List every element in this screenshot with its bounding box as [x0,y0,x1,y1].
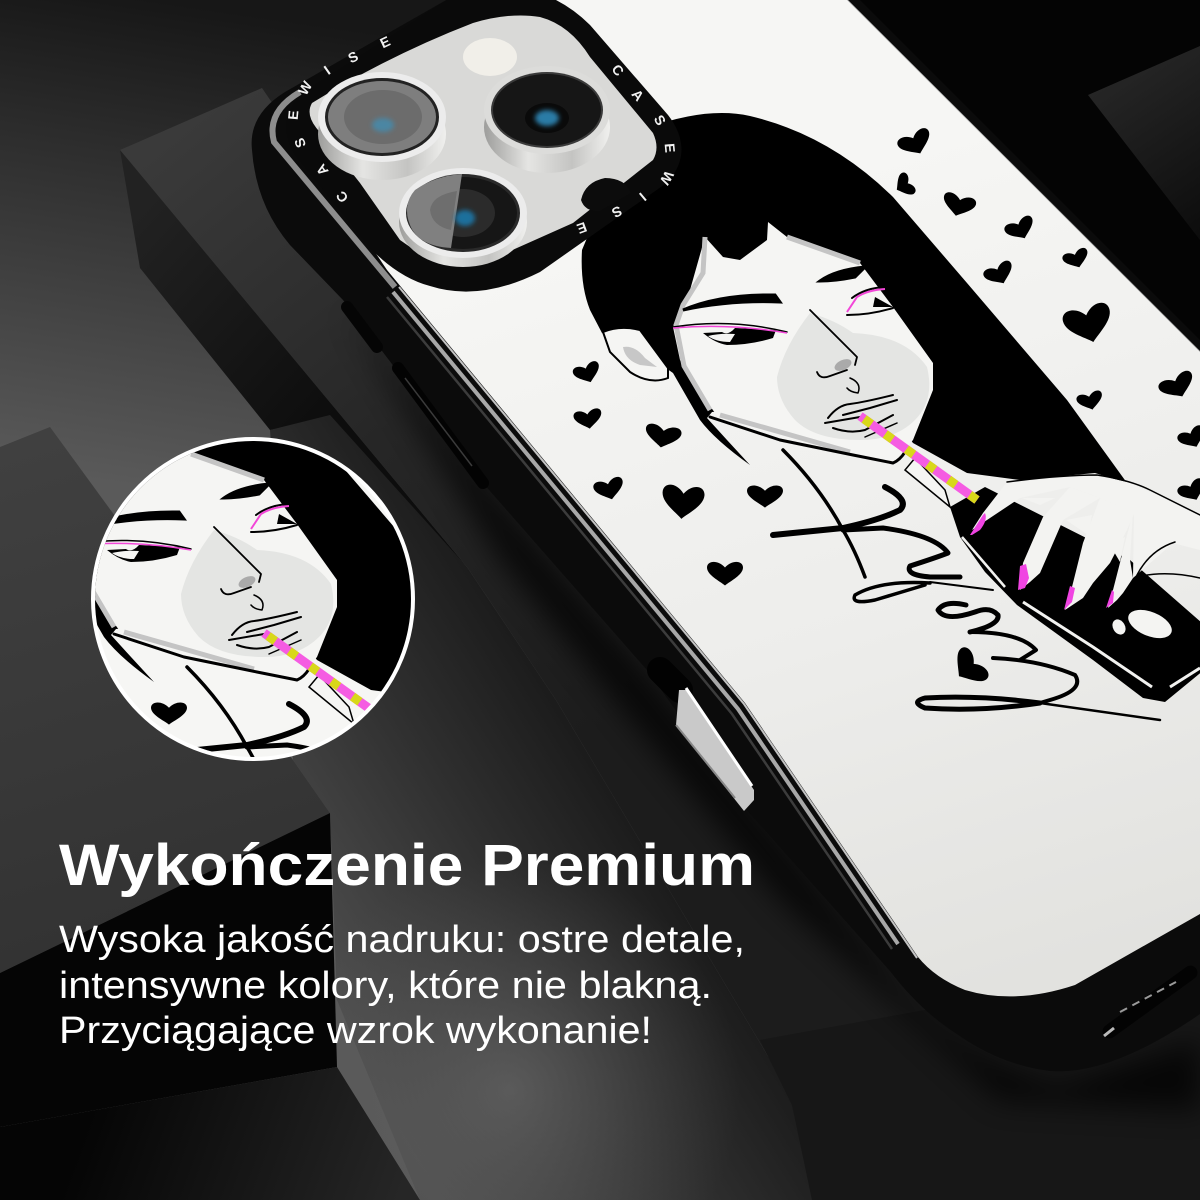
bottle [905,458,1200,702]
casewise lettering: A [629,86,647,104]
face [673,222,933,463]
body text [59,919,745,1052]
casewise lettering: I [636,190,650,204]
lens: bottom camera [399,168,527,267]
phone body [252,0,1200,1071]
island glass [310,15,656,263]
flash [463,38,517,76]
casewise lettering: I [321,62,333,78]
floor lower right [760,960,1200,1200]
clear bumper band [272,92,395,287]
block: lower front face [270,415,820,1200]
upper right dark backdrop [840,0,1200,360]
floor under lower left block [0,1067,420,1200]
casewise lettering: S [651,112,669,128]
hearts [572,126,1200,692]
straw [860,416,977,500]
body text: Przyciągające wzrok wykonanie! [59,1010,652,1052]
phone edge highlights [387,0,1200,958]
nails [970,513,1114,610]
lens: right camera [484,66,610,173]
face shading [676,237,929,452]
side buttons [347,307,754,811]
casewise lettering: E [377,33,393,51]
icon: silver side button [660,670,754,811]
block: central top surface [120,88,970,1110]
body text: Wysoka jakość nadruku: ostre detale, [59,919,745,961]
eyebrows [683,267,865,310]
upper right block [1088,46,1200,240]
casewise lettering: S [291,136,309,150]
casewise lettering: S [609,203,625,221]
nose and lips [810,310,897,437]
block: lower left top surface [0,427,330,973]
casewise lettering: W [656,168,677,188]
island black ring [286,0,682,292]
casewise lettering: E [575,219,589,237]
lens: left camera [318,72,446,180]
hair [582,113,1127,483]
inset illustration close-up [95,441,411,757]
inset zoom circle [91,437,415,761]
ear [603,328,668,380]
casewise lettering: W [295,78,316,98]
casewise lettering: E [662,143,678,153]
casewise lettering: E [285,110,301,120]
casewise lettering: S [345,48,361,66]
phone back: white print panel [340,0,1200,996]
eyes [673,287,893,345]
jaw and neck lines [710,417,905,577]
body text: intensywne kolory, które nie blakną. [59,965,712,1007]
charging port [1100,963,1200,1041]
icon: volume slot [398,368,483,483]
casewise lettering: A [313,161,331,179]
camera island [272,0,682,292]
hand [970,475,1200,610]
icon: upper switch [347,307,377,347]
title: Wykończenie Premium [59,833,755,898]
light glow on lower face [337,700,820,1200]
script lettering [773,487,1160,720]
casewise lettering: C [609,61,627,79]
block: lower left dark face [0,813,337,1127]
microphone hole [581,178,631,211]
block: central side face [120,150,467,567]
casewise lettering [285,33,678,237]
casewise lettering: C [333,188,351,206]
illustration on phone back [572,113,1200,720]
phone shadow [345,310,1200,1110]
